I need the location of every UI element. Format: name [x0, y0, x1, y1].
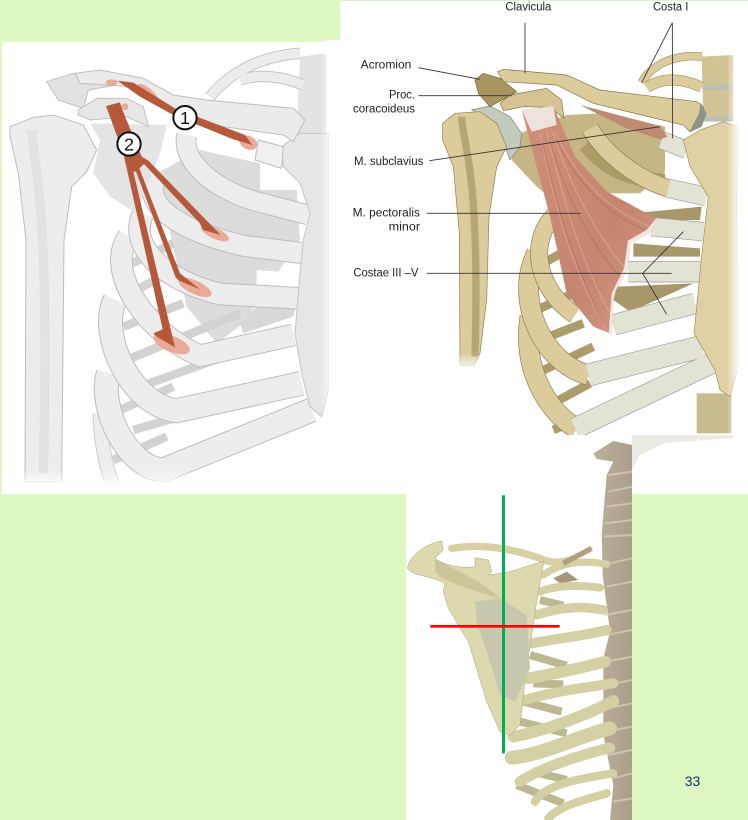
label: Acromion: Acromion	[361, 57, 411, 71]
panel: grey skeleton with highlighted muscles	[2, 40, 340, 494]
label: Costae III-V: Costae III –V	[353, 266, 418, 280]
scapula	[407, 541, 544, 735]
label: M. pectoralis minor	[353, 206, 420, 234]
humeral cartilage	[472, 106, 522, 160]
label: Proc. coracoideus: Proc.	[389, 87, 415, 101]
vertebral column	[593, 441, 632, 820]
humerus	[443, 112, 507, 367]
ribs	[100, 135, 312, 487]
ribs	[528, 56, 702, 428]
label: M. pectoralis minor: M. pectoralis	[353, 206, 420, 220]
label: Proc. coracoideus: coracoideus	[353, 102, 415, 116]
leader lines	[418, 23, 683, 314]
sternum	[282, 133, 328, 417]
muscle attachment patches	[106, 79, 260, 359]
muscle: subclavius	[117, 81, 252, 145]
red horizontal marker line	[430, 625, 560, 628]
upper spine and first ribs	[297, 53, 327, 133]
scapula body	[512, 113, 665, 200]
label: Costa I: Costa I	[653, 0, 688, 14]
coracoid process	[500, 88, 564, 118]
panel: coloured anatomical shoulder	[340, 0, 748, 494]
back ribs	[517, 600, 567, 803]
clavicle bone	[498, 69, 703, 132]
number badge 1: 1	[180, 108, 190, 128]
panel: side view of scapula and ribs	[406, 435, 632, 820]
acromion	[475, 73, 517, 107]
rib fade below right panel	[632, 435, 733, 470]
back ribs	[537, 250, 593, 430]
acromion	[47, 73, 117, 108]
ribs	[512, 562, 613, 818]
scapula	[90, 123, 167, 213]
number badge 1	[173, 106, 197, 129]
clavicle	[75, 70, 305, 142]
back of thorax and scapula shadow	[157, 150, 300, 343]
label: M. pectoralis minor: minor	[389, 220, 420, 234]
humerus	[10, 115, 97, 482]
page number: 33	[685, 773, 700, 789]
label: Clavicula: Clavicula	[505, 0, 552, 14]
sternum	[683, 122, 738, 397]
number badge 2: 2	[124, 134, 134, 154]
coracoid	[78, 98, 148, 127]
green vertical marker line	[502, 495, 505, 753]
pectoralis minor muscle	[522, 106, 656, 334]
number badge 2	[117, 132, 141, 156]
upper spine	[702, 55, 733, 122]
clavicle side view	[452, 546, 573, 562]
muscle: pectoralis minor	[106, 102, 221, 347]
label: M. subclavius: M. subclavius	[354, 154, 423, 168]
subclavius muscle	[580, 105, 667, 139]
costal cartilages	[575, 140, 712, 428]
label: Proc. coracoideus	[353, 87, 415, 116]
